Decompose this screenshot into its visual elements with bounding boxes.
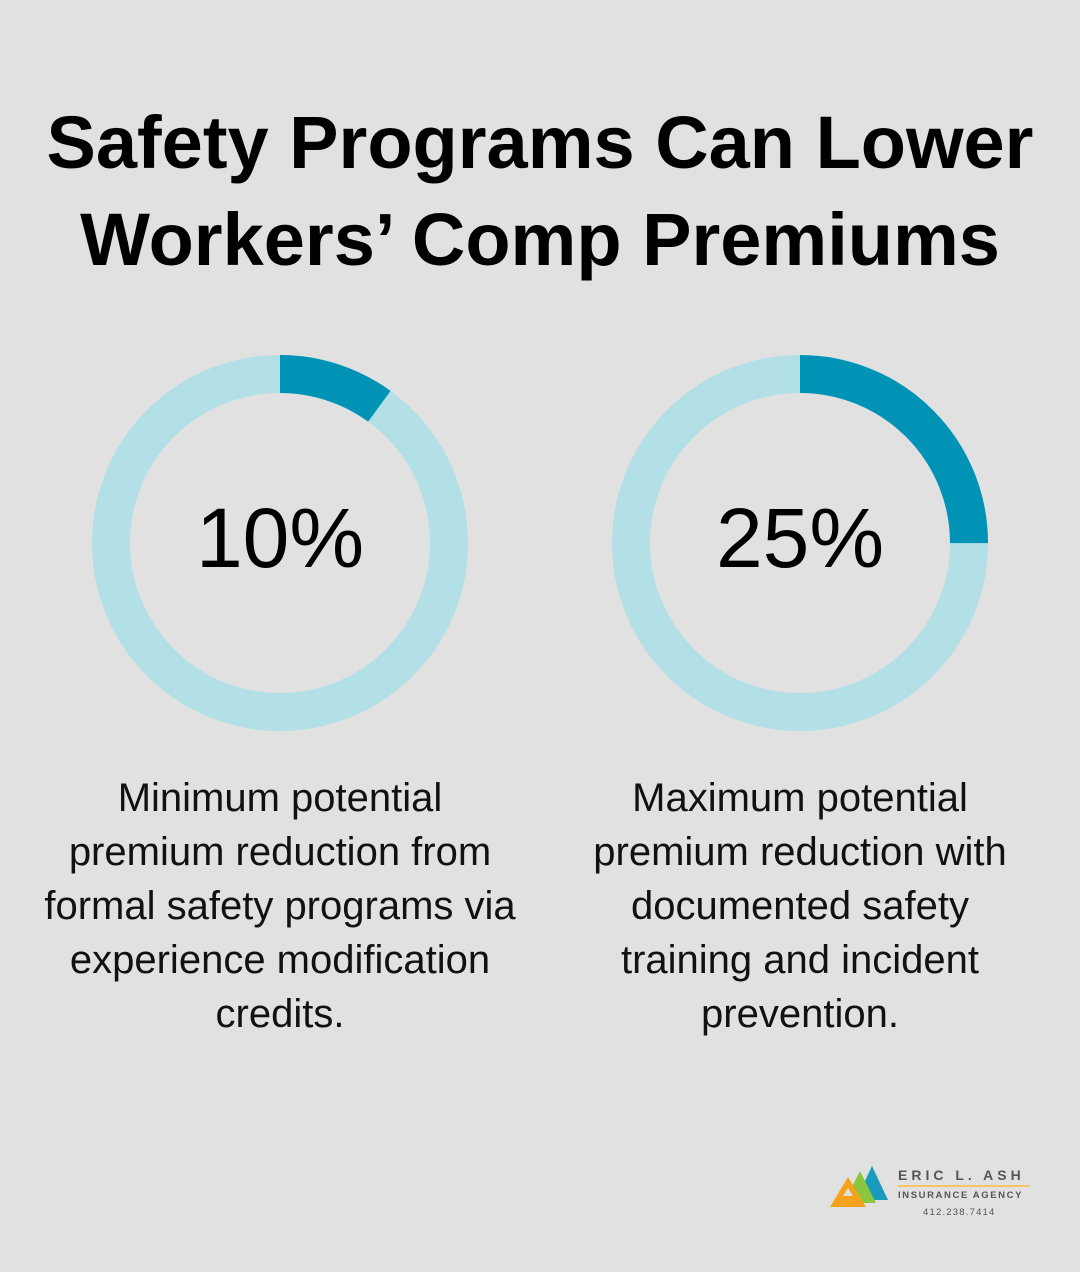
title: Safety Programs Can Lower (47, 101, 1033, 184)
logo (830, 1166, 1030, 1218)
description: maximum: Maximum potential (632, 776, 968, 820)
logo: 412.238.7414 (923, 1207, 996, 1218)
description: maximum: premium reduction with (593, 830, 1007, 874)
donut chart: 25% (612, 355, 988, 731)
description: minimum: credits. (216, 992, 344, 1036)
logo: INSURANCE AGENCY (898, 1190, 1023, 1201)
description: minimum (44, 776, 516, 1036)
donut chart: 10% (92, 355, 468, 731)
stat: 25%: 25% (716, 491, 884, 585)
title: Workers’ Comp Premiums (80, 198, 1000, 281)
description: minimum: experience modification (70, 938, 490, 982)
description: minimum: premium reduction from (69, 830, 491, 874)
description: minimum: Minimum potential (118, 776, 442, 820)
description: maximum: training and incident (621, 938, 979, 982)
title (47, 101, 1033, 281)
icon: triangles (830, 1166, 888, 1207)
description: maximum: documented safety (631, 884, 969, 928)
description: minimum: formal safety programs via (44, 884, 516, 928)
description: maximum: prevention. (701, 992, 899, 1036)
logo text: ERIC L. ASH (898, 1167, 1025, 1183)
description: maximum (593, 776, 1007, 1036)
stat: 10%: 10% (196, 491, 364, 585)
